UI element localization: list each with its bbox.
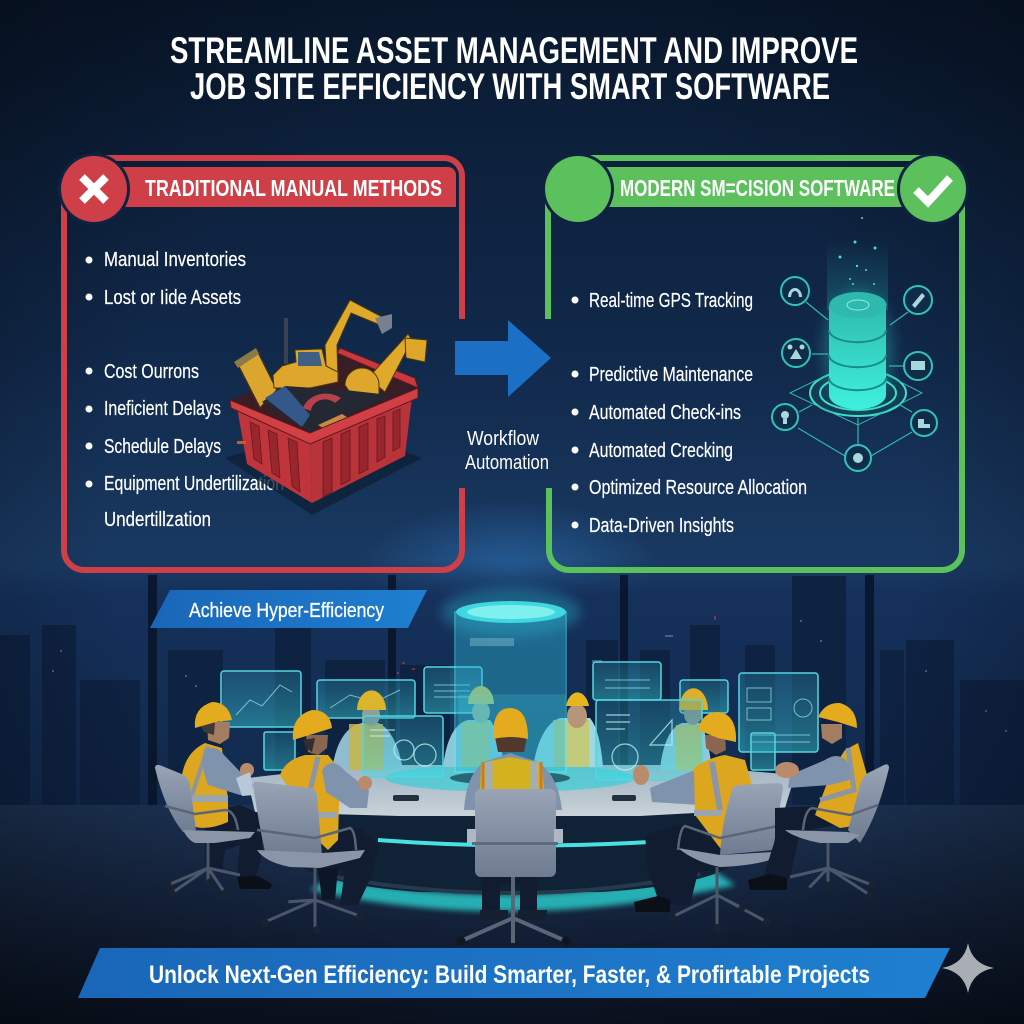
- label: workflow automation: Automation: [465, 452, 549, 474]
- table base: [262, 812, 775, 892]
- excavator body: [273, 349, 338, 388]
- worker and chair: near left: [253, 710, 378, 934]
- table cyan reflection: [385, 764, 635, 792]
- second machine arm: [368, 334, 412, 392]
- shirt arm: [203, 748, 253, 795]
- list: software benefits: [572, 290, 807, 537]
- banner: achieve hyper-efficiency: [150, 590, 427, 628]
- worker and chair: far left: [155, 702, 272, 896]
- title: [170, 30, 858, 107]
- list: manual problems: Lost or Iide Assets: [104, 287, 241, 309]
- list: manual problems: [86, 249, 284, 531]
- dumpster ribs: [250, 409, 400, 497]
- dumpster right wall: [310, 397, 412, 503]
- scene: front holographic displays: [264, 700, 775, 780]
- list: manual problems: Undertillzation: [104, 509, 211, 531]
- heading bar: traditional: [118, 167, 456, 207]
- scene: holographic displays behind table: [221, 662, 818, 752]
- shirt arm: [650, 768, 724, 805]
- heading bar: modern: [600, 167, 910, 207]
- heading bar: modern: MODERN SM=CISION SOFTWARE: [620, 175, 895, 201]
- panel: traditional manual methods: [58, 153, 462, 570]
- illustration: glowing database and icons: [772, 217, 937, 471]
- icon: blank green badge: [542, 153, 614, 225]
- shirt arm: [788, 756, 850, 788]
- list: manual problems: Equipment Undertilization: [104, 473, 284, 495]
- list: software benefits: Real-time GPS Tracking: [589, 290, 753, 312]
- dumpster interior: [230, 353, 418, 433]
- label: workflow automation: [465, 428, 549, 474]
- helmet: [818, 703, 857, 728]
- list: manual problems: Ineficient Delays: [104, 398, 221, 420]
- banner: achieve hyper-efficiency: Achieve Hyper-Efficiency: [189, 600, 384, 622]
- illustration: dumpster of equipment: [225, 300, 427, 515]
- worker and chair: far right: [748, 703, 889, 898]
- list: manual problems: Cost Ourrons: [104, 361, 199, 383]
- vest: [815, 743, 867, 828]
- icon: green check badge: [897, 153, 969, 225]
- dumpster shadow: [225, 425, 422, 515]
- panel: modern software: [542, 153, 969, 570]
- head: [495, 737, 527, 752]
- list: software benefits: Automated Crecking: [589, 440, 733, 462]
- shirt arm: [322, 763, 369, 808]
- trousers: [763, 805, 835, 878]
- arrow: manual to software: [455, 320, 551, 397]
- shirt: [464, 753, 562, 810]
- vest: [694, 755, 752, 848]
- list: software benefits: Optimized Resource Allocation: [589, 477, 807, 499]
- vest: [280, 755, 340, 850]
- phones: [393, 795, 636, 801]
- helmet: [195, 702, 232, 728]
- background: night city windows: [0, 560, 1024, 807]
- vest: [182, 743, 228, 828]
- worker and chair: center: [456, 708, 570, 946]
- chair: [720, 783, 783, 855]
- trousers: [205, 805, 263, 880]
- junk pile: [262, 386, 408, 432]
- label: workflow automation: Workflow: [467, 428, 539, 450]
- scene: table: [247, 764, 795, 911]
- trousers: [482, 870, 537, 910]
- vest: [480, 757, 544, 792]
- helmet: [698, 712, 736, 742]
- heading bar: traditional: TRADITIONAL MANUAL METHODS: [145, 175, 442, 201]
- chair: [155, 765, 196, 832]
- head: [821, 724, 842, 744]
- scene: back row workers: [332, 686, 712, 770]
- background: floor: [0, 805, 1024, 1024]
- list: software benefits: Automated Check-ins: [589, 402, 741, 424]
- led strip: [378, 840, 650, 846]
- chair: [253, 782, 322, 855]
- icon: sparkle star: [942, 943, 994, 993]
- worker and chair: near right: [633, 712, 783, 932]
- helmet: [293, 710, 332, 740]
- dumpster rim: [230, 388, 418, 444]
- head: [705, 735, 726, 755]
- scene: central holographic cylinder: [441, 588, 581, 773]
- excavator boom: [325, 300, 384, 382]
- trousers: [323, 828, 378, 905]
- icon: red cross badge: [58, 153, 130, 225]
- head: [306, 735, 328, 755]
- chair: [475, 789, 556, 877]
- banner: unlock next-gen efficiency: [78, 948, 950, 998]
- helmet: [493, 708, 528, 739]
- floor glow: [310, 870, 735, 911]
- list: software benefits: Predictive Maintenance: [589, 364, 753, 386]
- list: software benefits: Data-Driven Insights: [589, 515, 734, 537]
- list: manual problems: Schedule Delays: [104, 436, 221, 458]
- banner: unlock next-gen efficiency: Unlock Next-Gen Efficiency: Build Smarter, Faster, & Profirtable Projects: [149, 961, 870, 989]
- dumpster left wall: [237, 407, 312, 503]
- chair: [848, 764, 889, 843]
- trousers: [645, 825, 720, 905]
- yellow tube: [237, 350, 277, 408]
- list: manual problems: Manual Inventories: [104, 249, 246, 271]
- head: [207, 722, 230, 744]
- table top: [247, 765, 795, 816]
- pole: [284, 318, 288, 364]
